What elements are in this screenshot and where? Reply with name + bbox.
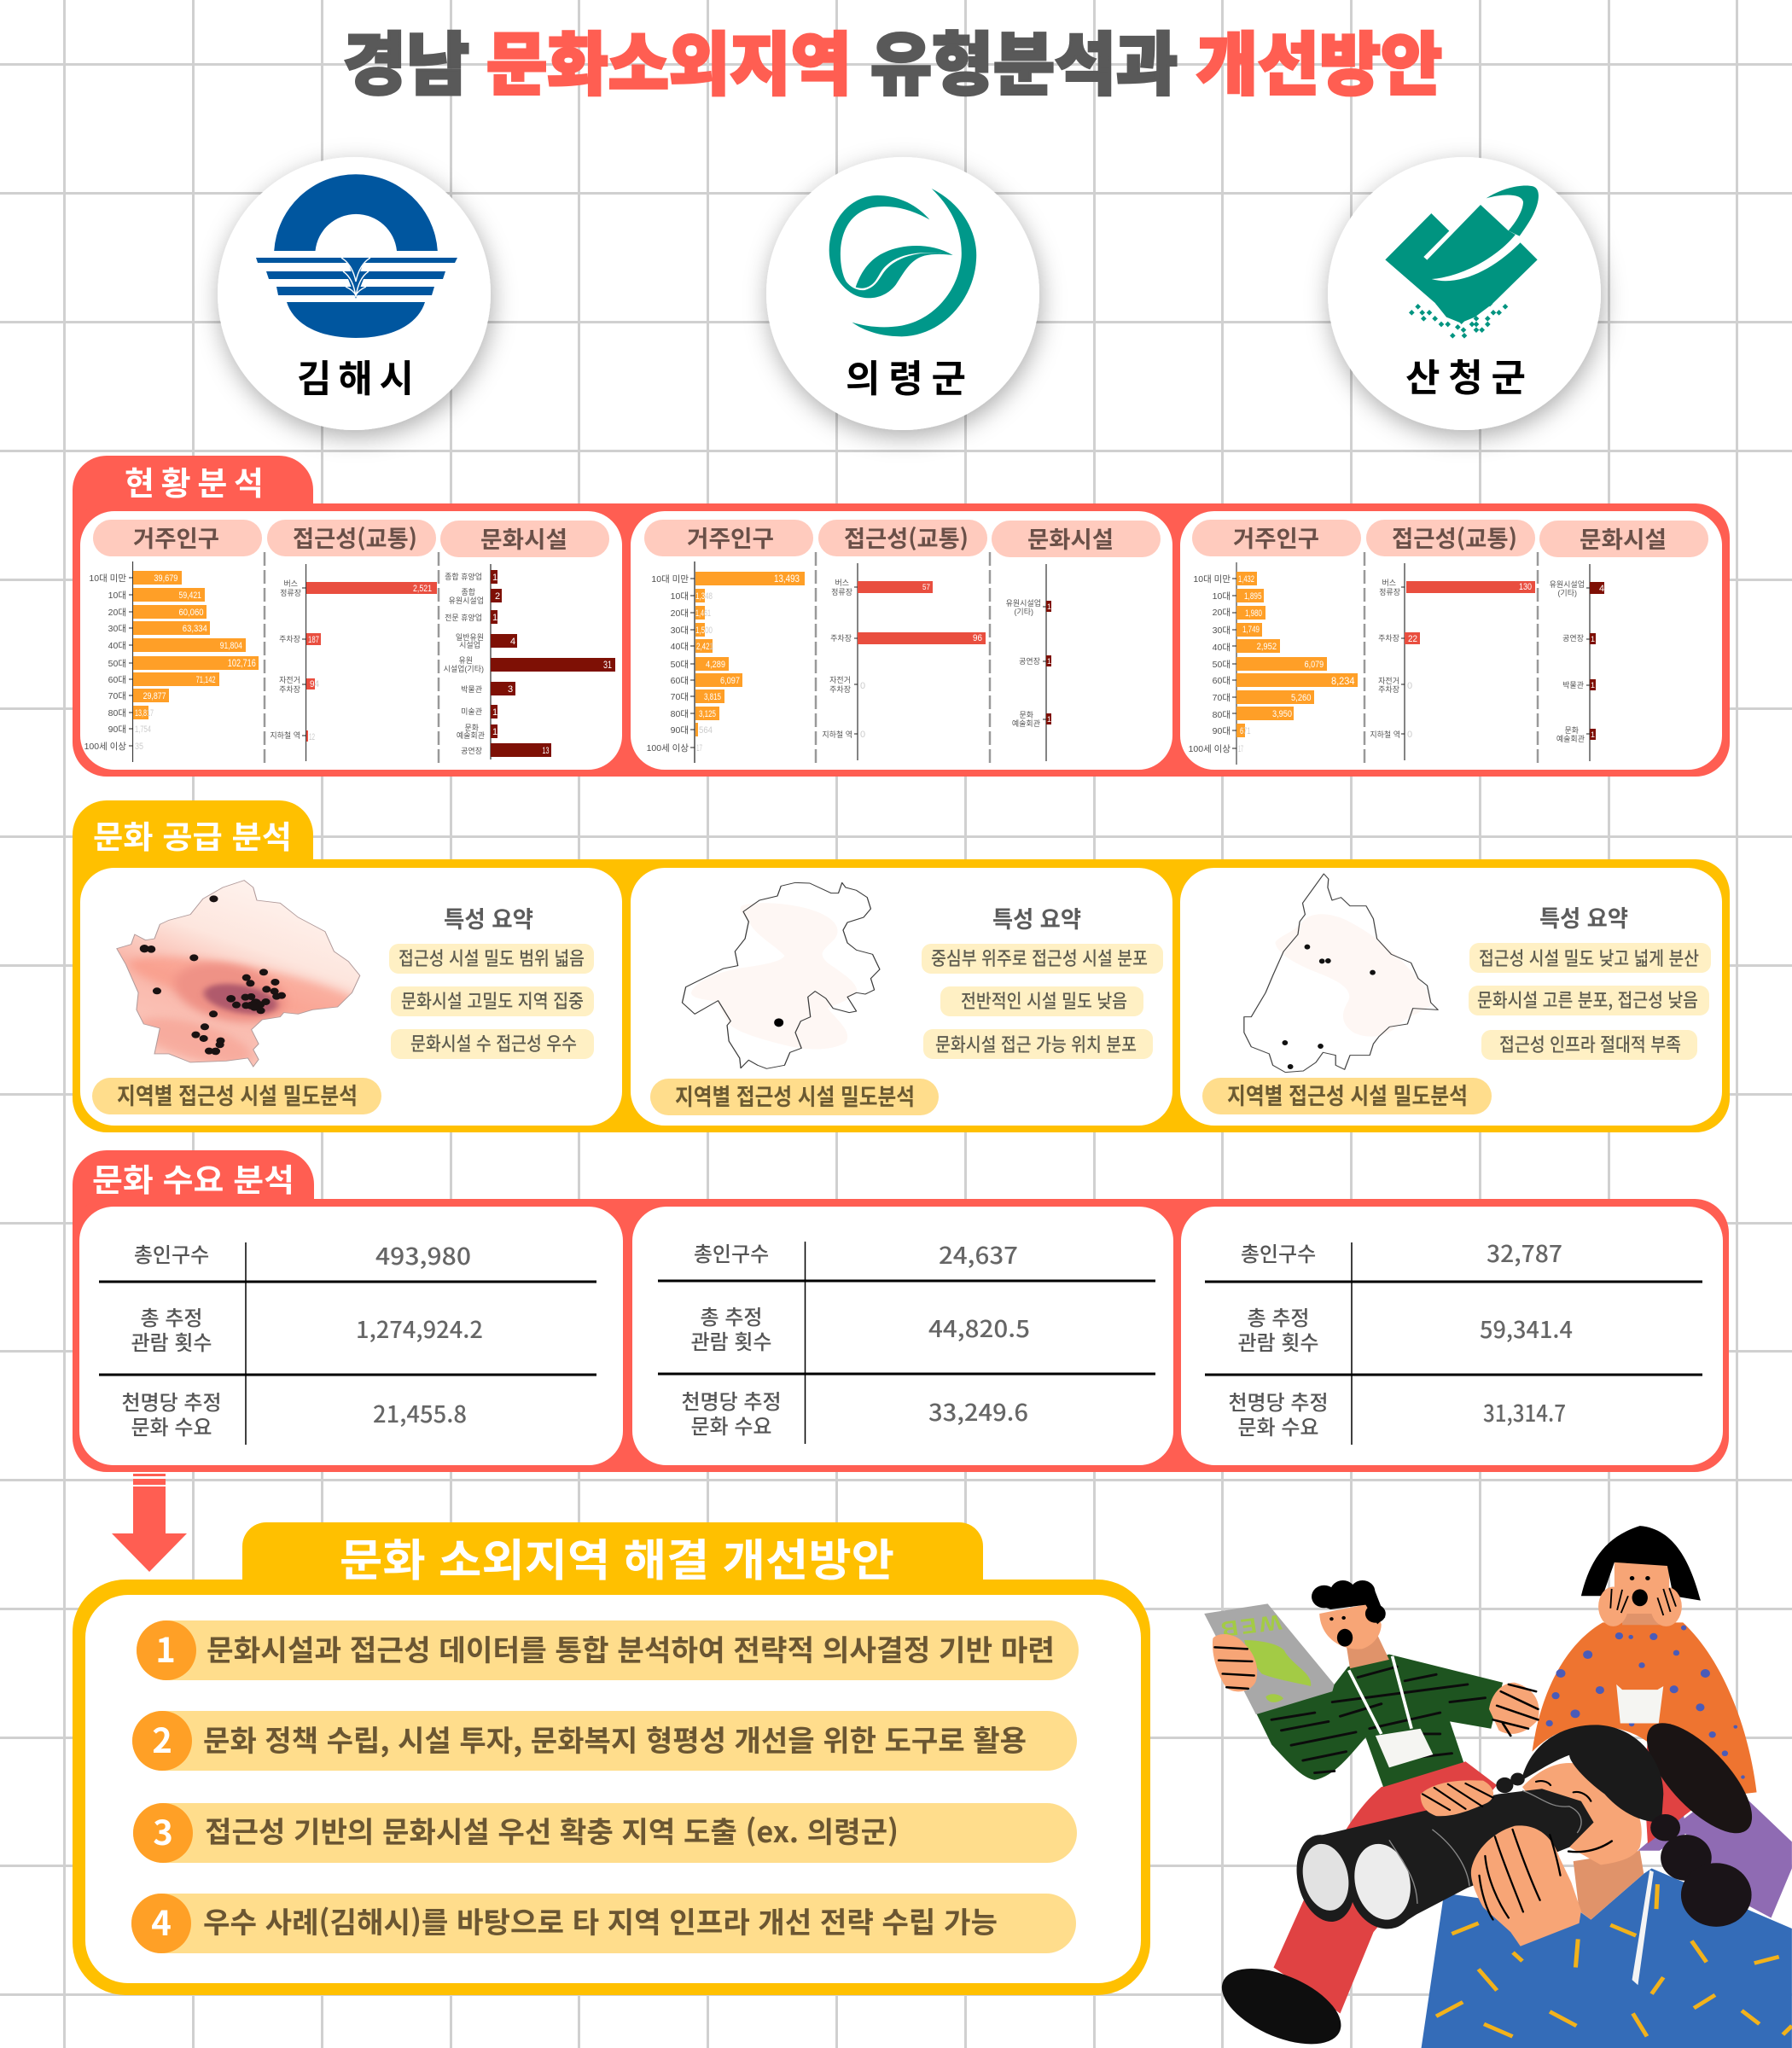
bar chart: 의령군 문화시설: 1 xyxy=(1047,657,1051,666)
item 2 xyxy=(132,1711,1077,1771)
bar chart: 김해시 문화시설: 31 xyxy=(603,659,612,671)
pill heading: 접근성(교통): 접근성(교통) xyxy=(844,521,969,554)
pill heading: 문화시설: 문화시설 xyxy=(480,521,567,555)
bar chart: 의령군 거주인구: 10대 미만 xyxy=(651,574,689,585)
bar chart: 의령군 문화시설 xyxy=(1006,564,1051,761)
facility dots xyxy=(774,1018,783,1027)
title xyxy=(343,10,1442,109)
density map: 김해시 xyxy=(116,880,360,1068)
bar chart: 김해시 문화시설: 2 xyxy=(495,591,500,602)
bar chart: 김해시 거주인구: 39,679 xyxy=(154,573,177,584)
bar chart: 의령군 거주인구 xyxy=(647,561,805,763)
bar chart: 산청군 거주인구: 2,952 xyxy=(1257,642,1277,652)
bar chart: 김해시 거주인구: 60대 xyxy=(108,675,126,685)
bar chart: 의령군 문화시설: 1 xyxy=(1047,715,1051,724)
table: 김해시: 1,274,924.2 xyxy=(356,1312,483,1345)
heading: 현황분석: 현황분석 xyxy=(125,457,264,504)
bar chart: 김해시 거주인구: 71,142 xyxy=(196,675,216,685)
bar chart: 산청군 접근성: 지하철 역 xyxy=(1370,730,1400,739)
bar chart: 김해시 거주인구: 10대 xyxy=(108,591,126,601)
table: 김해시: 493,980 xyxy=(375,1238,471,1271)
bar chart: 김해시 거주인구: 80대 xyxy=(108,708,126,719)
bar chart: 김해시 접근성: 주차장 xyxy=(279,634,300,643)
bar chart: 산청군 문화시설: 1 xyxy=(1591,730,1595,739)
pill heading: 접근성(교통) xyxy=(1366,520,1535,556)
bar chart: 의령군 거주인구: 1,348 xyxy=(695,591,713,602)
bar chart: 의령군 거주인구: 80대 xyxy=(671,709,689,719)
facility dots xyxy=(1282,945,1376,1069)
pill heading: 거주인구 xyxy=(1192,520,1361,556)
bar chart: 김해시 거주인구 xyxy=(84,561,259,762)
heading: 문화 소외지역 해결 개선방안 xyxy=(340,1525,894,1589)
bar chart: 의령군 거주인구: 10대 xyxy=(671,591,689,602)
panel: 현황분석 xyxy=(73,456,1730,777)
bar chart: 의령군 접근성: 정류장 xyxy=(831,588,852,596)
bar chart: 산청군 문화시설 xyxy=(1550,564,1604,761)
icon: Sancheong emblem xyxy=(1385,185,1539,339)
bar chart: 산청군 거주인구: 1,895 xyxy=(1244,591,1261,602)
bar chart: 김해시 문화시설: 1 xyxy=(492,727,497,737)
table: 산청군: 관람 횟수 xyxy=(1237,1326,1319,1356)
bar chart: 김해시 접근성: 주차장 xyxy=(279,684,300,694)
bar chart: 김해시 문화시설: 종합 xyxy=(461,588,475,596)
bar chart: 김해시 거주인구: 50대 xyxy=(108,659,126,669)
table: 의령군: 24,637 xyxy=(939,1237,1018,1271)
bar chart: 의령군 거주인구: 1,500 xyxy=(695,625,713,636)
bar chart: 산청군 접근성 xyxy=(1370,563,1535,760)
bar chart: 김해시 문화시설: 미술관 xyxy=(461,707,482,716)
table: 산청군 xyxy=(1181,1207,1723,1465)
bar chart: 산청군 거주인구: 6,079 xyxy=(1305,660,1324,670)
caption pill: 지역별 접근성 시설 밀도분석 xyxy=(117,1078,358,1111)
bar chart: 산청군 문화시설: 유원시설업 xyxy=(1550,580,1585,589)
pill heading: 거주인구: 거주인구 xyxy=(133,521,219,554)
bar chart: 김해시 거주인구: 35 xyxy=(135,742,143,752)
bar chart: 산청군 거주인구: 10대 xyxy=(1213,591,1231,602)
card: 산청군 공급 xyxy=(1180,868,1722,1126)
heading: 특성 요약: 특성 요약 xyxy=(444,901,533,934)
heading: 문화 수요 분석: 문화 수요 분석 xyxy=(92,1155,294,1201)
chip: 문화시설 고밀도 지역 집중 xyxy=(401,986,584,1014)
bar chart: 산청군 거주인구: 1,749 xyxy=(1242,625,1260,635)
bar chart: 의령군 거주인구: 13,493 xyxy=(774,573,800,585)
bar chart: 산청군 거주인구: 10대 미만 xyxy=(1193,574,1231,585)
bar chart: 의령군 접근성: 0 xyxy=(860,681,865,691)
bar chart: 의령군 거주인구: 30대 xyxy=(671,625,689,636)
bar chart: 산청군 거주인구: 40대 xyxy=(1213,643,1231,653)
bar chart: 산청군 거주인구: 671 xyxy=(1240,726,1251,736)
label: 김해시: 김해시 xyxy=(297,348,414,403)
bar chart: 김해시 문화시설: 1 xyxy=(492,573,497,583)
bar chart: 산청군 접근성: 주차장 xyxy=(1378,633,1399,643)
bar chart: 산청군 접근성: 22 xyxy=(1408,634,1417,644)
bar chart: 산청군 거주인구: 1,432 xyxy=(1238,574,1254,585)
bar chart: 산청군 접근성: 자전거 xyxy=(1378,677,1399,685)
arrow xyxy=(112,1474,187,1572)
bar chart: 의령군 거주인구: 3,815 xyxy=(704,692,721,702)
bar chart: 의령군 접근성: 96 xyxy=(973,633,982,643)
chip: 전반적인 시설 밀도 낮음 xyxy=(961,986,1127,1014)
pill heading: 문화시설 xyxy=(1539,521,1708,557)
card: 의령군 현황 xyxy=(631,511,1172,770)
bar chart: 의령군 접근성: 57 xyxy=(922,583,930,591)
pill heading: 문화시설 xyxy=(440,521,609,557)
bar chart: 의령군 문화시설: (기타) xyxy=(1014,608,1033,616)
bar chart: 산청군 거주인구: 17 xyxy=(1238,744,1243,754)
table: 김해시: 총 추정 xyxy=(141,1301,202,1331)
bar chart: 김해시 문화시설: 1 xyxy=(492,707,497,718)
icon: Uiryeong emblem xyxy=(829,189,976,336)
bar chart: 산청군 문화시설: 공연장 xyxy=(1562,634,1584,643)
bar chart: 산청군 거주인구 xyxy=(1189,562,1358,765)
icon: Gimhae emblem xyxy=(256,174,457,338)
title: 문화소외지역 xyxy=(486,10,852,109)
illustration: three people with binoculars xyxy=(1204,1526,1792,2048)
bar chart: 김해시 문화시설: 문화 xyxy=(464,724,479,732)
bar chart: 김해시 문화시설: 4 xyxy=(510,637,515,647)
card: 김해시 현황 xyxy=(80,511,622,770)
bar chart: 김해시 거주인구: 100세 이상 xyxy=(84,742,126,752)
bar chart: 김해시 문화시설: 종합 휴양업 xyxy=(445,573,482,581)
logo badge: 산청군 xyxy=(1328,157,1601,430)
bar chart: 의령군 문화시설: 유원시설업 xyxy=(1006,599,1041,608)
bar chart: 산청군 접근성: 정류장 xyxy=(1379,588,1400,596)
item 1: 1 xyxy=(155,1623,176,1673)
bar chart: 산청군 문화시설: 1 xyxy=(1591,681,1595,689)
chip: 접근성 시설 밀도 범위 넓음 xyxy=(399,944,585,971)
title: 경남 xyxy=(343,10,469,109)
bar chart: 산청군 거주인구: 90대 xyxy=(1213,726,1231,736)
table: 김해시: 관람 횟수 xyxy=(131,1326,212,1356)
bar chart: 김해시 문화시설: 시설업 xyxy=(459,641,480,649)
bar chart: 산청군 접근성: 버스 xyxy=(1382,579,1396,587)
pill heading: 문화시설: 문화시설 xyxy=(1027,521,1114,555)
bar chart: 김해시 문화시설: 유원 xyxy=(458,656,473,665)
bar chart: 의령군 거주인구: 40대 xyxy=(671,642,689,652)
bar chart: 김해시 문화시설 xyxy=(444,564,615,759)
bar chart: 김해시 문화시설: 3 xyxy=(508,684,513,695)
table: 의령군: 문화 수요 xyxy=(690,1410,772,1440)
bar chart: 김해시 거주인구: 10대 미만 xyxy=(89,573,126,584)
bar chart: 김해시 거주인구: 70대 xyxy=(108,691,126,701)
bar chart: 산청군 문화시설: 4 xyxy=(1599,584,1604,594)
label: 의령군: 의령군 xyxy=(846,348,966,403)
table: 의령군: 33,249.6 xyxy=(928,1394,1028,1428)
bar chart: 산청군 거주인구: 1,980 xyxy=(1245,608,1262,619)
pill heading: 거주인구 xyxy=(93,520,262,556)
bar chart: 산청군 접근성: 0 xyxy=(1407,681,1412,691)
bar chart: 의령군 거주인구: 4,289 xyxy=(706,660,725,670)
bar chart: 의령군 문화시설: 1 xyxy=(1047,602,1051,611)
card: 김해시 공급 xyxy=(80,868,622,1126)
bar chart: 김해시 거주인구: 20대 xyxy=(108,608,126,618)
table: 의령군: 총 추정 xyxy=(701,1300,762,1330)
facility dots xyxy=(140,895,286,1055)
bar chart: 김해시 거주인구: 59,421 xyxy=(179,591,201,601)
bar chart: 의령군 거주인구: 6,097 xyxy=(720,676,740,686)
figure: man in green with tablet xyxy=(1204,1580,1539,2048)
bar chart: 의령군 접근성: 주차장 xyxy=(830,633,852,643)
pill heading: 접근성(교통) xyxy=(818,520,987,556)
bar chart: 김해시 거주인구: 91,804 xyxy=(220,641,242,651)
item 3: 접근성 기반의 문화시설 우선 확충 지역 도출 (ex. 의령군) xyxy=(205,1809,899,1851)
table: 산청군: 천명당 추정 xyxy=(1228,1386,1329,1416)
bar chart: 의령군 접근성 xyxy=(822,563,986,760)
bar chart: 김해시 접근성: 94 xyxy=(310,679,319,689)
bar chart: 의령군 거주인구: 20대 xyxy=(671,608,689,619)
bar chart: 산청군 거주인구: 80대 xyxy=(1213,710,1231,720)
pill heading: 문화시설: 문화시설 xyxy=(1580,521,1667,555)
card: 의령군 공급 xyxy=(631,868,1172,1126)
bar chart: 산청군 거주인구: 50대 xyxy=(1213,660,1231,670)
bar chart: 김해시 거주인구: 60,060 xyxy=(179,608,203,618)
bar chart: 김해시 접근성: 12 xyxy=(309,732,315,742)
item 2: 문화 정책 수립, 시설 투자, 문화복지 형평성 개선을 위한 도구로 활용 xyxy=(203,1718,1027,1760)
bar chart: 의령군 접근성: 주차장 xyxy=(829,684,851,694)
bar chart: 의령군 거주인구: 60대 xyxy=(671,676,689,686)
bar chart: 김해시 접근성 xyxy=(270,564,437,761)
chip: 문화시설 수 접근성 우수 xyxy=(410,1029,577,1056)
table: 김해시: 총인구수 xyxy=(134,1238,209,1268)
panel: 문화 소외지역 해결 개선방안 xyxy=(73,1522,1150,1995)
table: 김해시: 21,455.8 xyxy=(373,1396,467,1429)
caption pill: 지역별 접근성 시설 밀도분석 xyxy=(1227,1078,1468,1111)
bar chart: 의령군 접근성: 버스 xyxy=(835,579,849,587)
table: 의령군: 총인구수 xyxy=(694,1237,769,1267)
bar chart: 의령군 문화시설: 공연장 xyxy=(1019,657,1040,666)
bar chart: 의령군 거주인구: 100세 이상 xyxy=(647,743,689,753)
bar chart: 산청군 거주인구: 100세 이상 xyxy=(1189,744,1231,754)
bar chart: 김해시 거주인구: 13,817 xyxy=(135,708,154,719)
bar chart: 김해시 접근성: 버스 xyxy=(283,579,298,588)
bar chart: 김해시 문화시설: 유원시설업 xyxy=(449,596,484,605)
item 3: 3 xyxy=(153,1806,173,1855)
bar chart: 의령군 거주인구: 3,125 xyxy=(699,709,716,719)
title: 유형분석과 xyxy=(870,10,1178,109)
table: 의령군: 관람 횟수 xyxy=(690,1325,772,1355)
table: 산청군: 32,787 xyxy=(1487,1236,1562,1269)
bar chart: 김해시 문화시설: 예술회관 xyxy=(457,731,485,740)
bar chart: 김해시 접근성: 자전거 xyxy=(279,676,300,684)
bar chart: 의령군 문화시설: 예술회관 xyxy=(1012,719,1040,728)
bar chart: 의령군 거주인구: 70대 xyxy=(671,692,689,702)
bar chart: 김해시 문화시설: 전문 휴양업 xyxy=(445,614,482,622)
bar chart: 의령군 거주인구: 564 xyxy=(699,725,713,736)
table: 산청군: 59,341.4 xyxy=(1480,1312,1573,1345)
bar chart: 김해시 거주인구: 40대 xyxy=(108,641,126,651)
bar chart: 산청군 접근성: 주차장 xyxy=(1378,684,1399,694)
bar chart: 의령군 문화시설: 문화 xyxy=(1019,711,1033,719)
bar chart: 의령군 거주인구: 50대 xyxy=(671,660,689,670)
bar chart: 산청군 거주인구: 70대 xyxy=(1213,693,1231,703)
item 3 xyxy=(133,1803,1077,1863)
logo badge: 김해시 xyxy=(218,157,491,430)
heading: 문화 공급 분석: 문화 공급 분석 xyxy=(93,812,292,858)
bar chart: 산청군 거주인구: 60대 xyxy=(1213,676,1231,686)
bar chart: 김해시 문화시설: 박물관 xyxy=(461,685,482,694)
item 1: 문화시설과 접근성 데이터를 통합 분석하여 전략적 의사결정 기반 마련 xyxy=(207,1627,1055,1669)
table: 산청군: 31,314.7 xyxy=(1483,1395,1566,1428)
pill heading: 접근성(교통) xyxy=(267,520,436,556)
bar chart: 의령군 접근성: 0 xyxy=(860,730,865,740)
pill heading: 거주인구 xyxy=(644,520,813,556)
bar chart: 의령군 접근성: 지하철 역 xyxy=(822,730,852,739)
card: 산청군 현황 xyxy=(1180,511,1722,770)
chip: 접근성 인프라 절대적 부족 xyxy=(1499,1030,1681,1057)
label: 산청군: 산청군 xyxy=(1405,347,1526,402)
pill heading: 접근성(교통): 접근성(교통) xyxy=(1392,521,1517,554)
bar chart: 산청군 문화시설: 예술회관 xyxy=(1556,735,1585,743)
heading: 특성 요약: 특성 요약 xyxy=(1539,900,1628,934)
bar chart: 의령군 거주인구: 1,461 xyxy=(695,608,711,619)
pill heading: 문화시설 xyxy=(992,521,1161,557)
bar chart: 의령군 접근성: 자전거 xyxy=(829,676,851,684)
bar chart: 산청군 문화시설: 1 xyxy=(1591,635,1595,643)
bar chart: 김해시 접근성: 정류장 xyxy=(280,589,301,597)
bar chart: 의령군 거주인구: 2,421 xyxy=(696,642,713,652)
pill heading: 거주인구: 거주인구 xyxy=(687,521,774,554)
bar chart: 김해시 접근성: 2,521 xyxy=(413,584,432,594)
bar chart: 김해시 접근성: 187 xyxy=(308,635,319,645)
bar chart: 산청군 거주인구: 20대 xyxy=(1213,608,1231,618)
panel: 문화 공급 분석 xyxy=(73,800,1730,1132)
bar chart: 산청군 거주인구: 8,234 xyxy=(1331,675,1355,687)
table: 산청군: 총 추정 xyxy=(1248,1301,1309,1331)
item 4: 우수 사례(김해시)를 바탕으로 타 지역 인프라 개선 전략 수립 가능 xyxy=(203,1900,998,1941)
bar chart: 김해시 거주인구: 63,334 xyxy=(183,624,207,634)
item 4 xyxy=(131,1894,1076,1953)
bar chart: 산청군 접근성: 130 xyxy=(1519,582,1532,592)
bar chart: 산청군 문화시설: 문화 xyxy=(1564,726,1579,735)
bar chart: 의령군 거주인구: 90대 xyxy=(671,725,689,736)
chip: 접근성 시설 밀도 낮고 넓게 분산 xyxy=(1479,944,1699,971)
chip: 문화시설 접근 가능 위치 분포 xyxy=(935,1030,1137,1057)
bar chart: 김해시 문화시설: 공연장 xyxy=(461,747,482,755)
table: 산청군: 문화 수요 xyxy=(1237,1411,1319,1440)
pill heading: 접근성(교통): 접근성(교통) xyxy=(293,521,417,554)
logo badge: 의령군 xyxy=(766,157,1039,430)
panel: 문화 수요 분석 xyxy=(73,1150,1729,1472)
title: 개선방안 xyxy=(1196,10,1442,109)
chip: 중심부 위주로 접근성 시설 분포 xyxy=(931,944,1148,971)
bar chart: 김해시 거주인구: 90대 xyxy=(108,724,126,735)
item 4: 4 xyxy=(151,1896,172,1946)
label: WEB on tablet: WEB xyxy=(1219,1610,1283,1642)
table: 의령군: 44,820.5 xyxy=(928,1311,1030,1344)
figure: woman with binoculars xyxy=(1289,1725,1792,2048)
table: 의령군: 천명당 추정 xyxy=(681,1385,782,1415)
bar chart: 산청군 거주인구: 5,260 xyxy=(1291,693,1311,703)
table: 의령군 xyxy=(632,1207,1173,1465)
bar chart: 김해시 거주인구: 29,877 xyxy=(143,691,166,701)
item 1 xyxy=(137,1620,1079,1680)
bar chart: 김해시 문화시설: 일반유원 xyxy=(456,633,484,642)
density map: 산청군 xyxy=(1244,874,1438,1073)
table: 김해시 xyxy=(79,1207,623,1465)
item 2: 2 xyxy=(152,1713,172,1763)
caption pill: 지역별 접근성 시설 밀도분석 xyxy=(675,1079,915,1112)
pill heading: 거주인구: 거주인구 xyxy=(1233,521,1319,554)
heading: 특성 요약: 특성 요약 xyxy=(992,901,1081,934)
bar chart: 산청군 접근성: 0 xyxy=(1407,730,1412,740)
table: 김해시: 천명당 추정 xyxy=(121,1386,222,1416)
bar chart: 김해시 문화시설: 13 xyxy=(543,746,550,756)
bar chart: 산청군 거주인구: 3,950 xyxy=(1272,709,1292,719)
table: 산청군: 총인구수 xyxy=(1241,1237,1316,1267)
table: 김해시: 문화 수요 xyxy=(131,1411,212,1440)
bar chart: 산청군 문화시설: 박물관 xyxy=(1562,681,1584,689)
bar chart: 산청군 문화시설: (기타) xyxy=(1557,589,1577,597)
bar chart: 산청군 거주인구: 30대 xyxy=(1213,625,1231,636)
bar chart: 김해시 문화시설: 시설업(기타) xyxy=(444,665,484,673)
bar chart: 의령군 거주인구: 17 xyxy=(696,743,702,753)
chip: 문화시설 고른 분포, 접근성 낮음 xyxy=(1477,986,1698,1013)
bar chart: 김해시 접근성: 지하철 역 xyxy=(270,731,300,740)
bar chart: 김해시 거주인구: 1,754 xyxy=(135,724,151,735)
density map: 의령군 xyxy=(682,882,880,1068)
bar chart: 김해시 거주인구: 30대 xyxy=(108,624,126,634)
bar chart: 김해시 거주인구: 102,716 xyxy=(228,657,256,669)
bar chart: 김해시 문화시설: 1 xyxy=(492,613,497,623)
figure: woman in orange xyxy=(1532,1526,1792,1918)
